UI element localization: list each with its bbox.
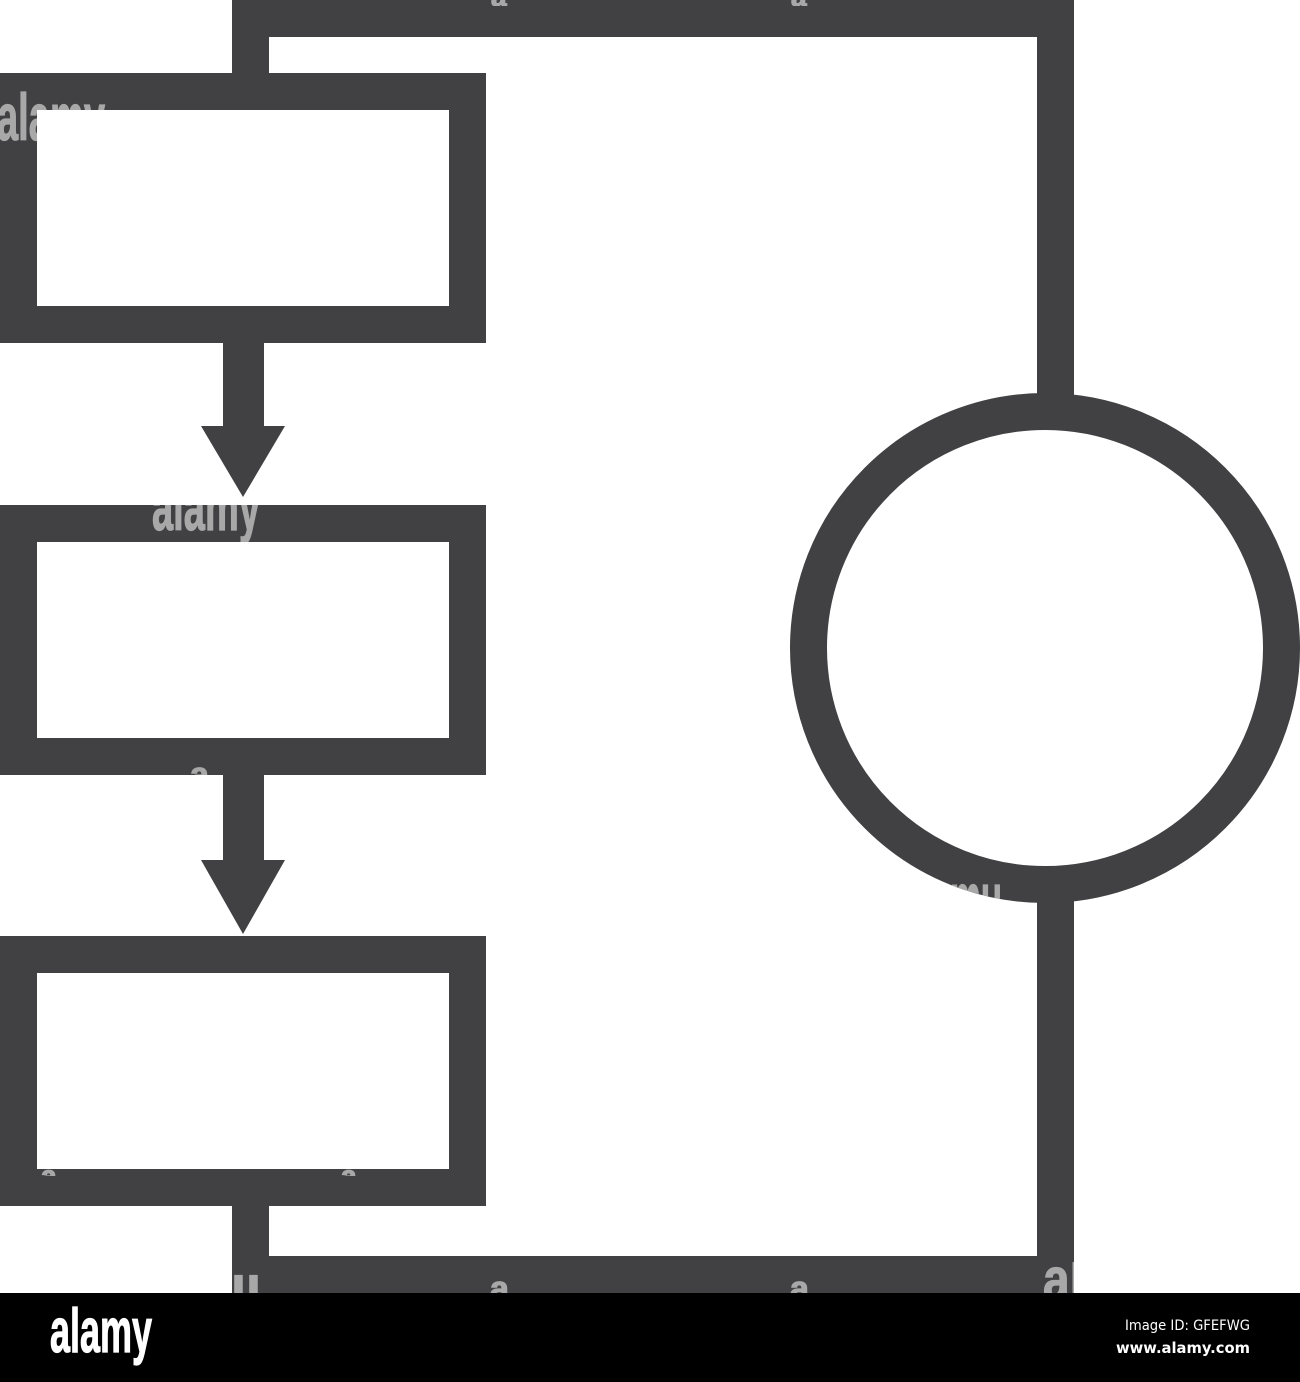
watermark fragments: ll [231, 1266, 261, 1331]
watermark fragments: a [341, 1160, 357, 1191]
footer logo: alamy [50, 1297, 152, 1366]
flowchart box 2 [18, 524, 468, 756]
watermark fragments: alamy [0, 80, 105, 154]
image id: Image ID: GFEFWG [1125, 1318, 1250, 1334]
arrow: box 1 to box 2 [201, 343, 285, 497]
watermark fragments: al [1043, 1246, 1083, 1313]
watermark fragments: a [790, 1270, 810, 1308]
website: www.alamy.com [1116, 1339, 1250, 1357]
flowchart box 1 [18, 92, 468, 324]
footer bar [0, 1293, 1300, 1382]
arrow: box 2 to box 3 [201, 775, 285, 934]
connector: loop line from top box through circle to bottom box [250, 18, 1056, 1274]
watermark fragments: mu [950, 860, 1002, 934]
flowchart box 3 [18, 954, 468, 1188]
watermark fragments: a [490, 1270, 510, 1308]
watermark fragments: a [41, 1160, 57, 1191]
watermark fragments: a [190, 756, 210, 794]
circle node [808, 412, 1282, 884]
watermark fragments: alamy [152, 470, 260, 544]
